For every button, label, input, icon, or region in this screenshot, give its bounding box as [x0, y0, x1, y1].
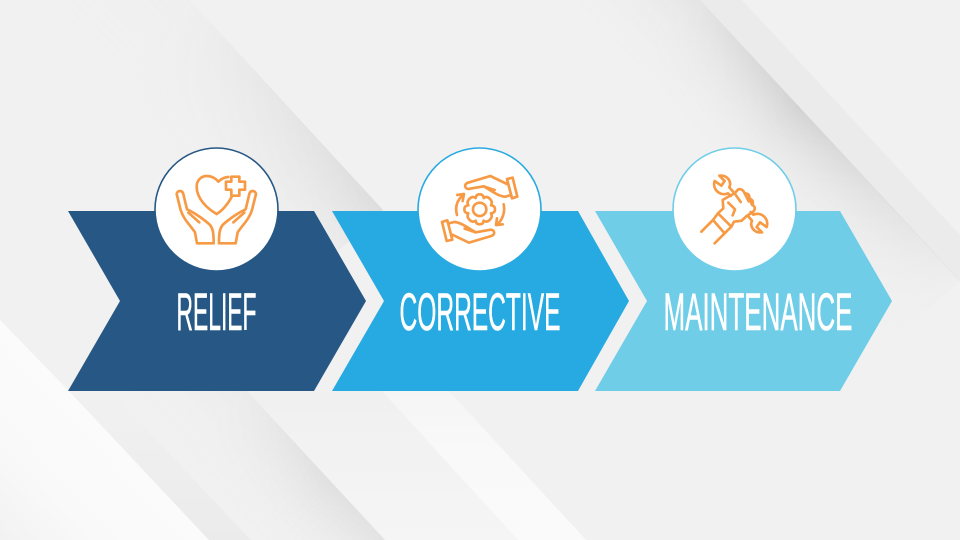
icon badge: heart in hands	[155, 148, 278, 271]
chevron: relief	[68, 211, 366, 391]
chevron: relief: RELIEF	[176, 283, 256, 342]
chevron: corrective: CORRECTIVE	[400, 283, 560, 342]
chevron: corrective	[332, 211, 629, 391]
icon badge: hand holding wrench	[673, 148, 796, 271]
icon badge: hands and gear	[418, 148, 541, 271]
chevron: maintenance	[595, 211, 892, 391]
